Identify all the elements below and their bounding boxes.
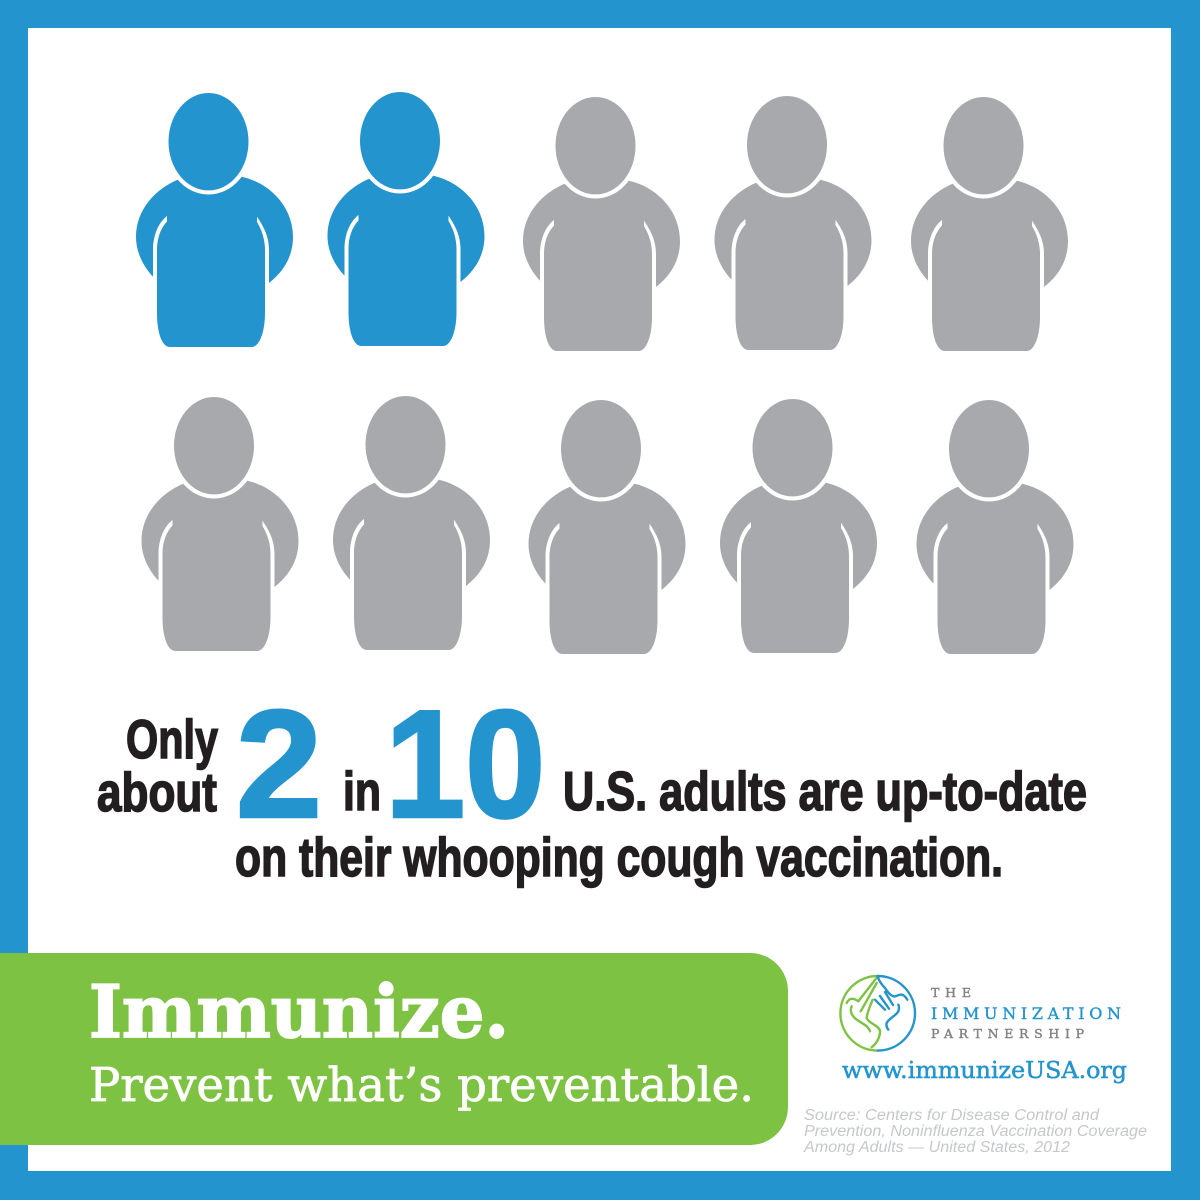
person 1 (blue, vaccinated) — [136, 89, 293, 347]
source citation — [803, 1107, 1147, 1156]
slogan heading: Immunize. — [89, 969, 509, 1054]
text: PARTNERSHIP: PARTNERSHIP — [931, 1026, 1084, 1041]
source line 1: Source: Centers for Disease Control and — [804, 1107, 1100, 1124]
text: on their whooping cough vaccination.: on their whooping cough vaccination. — [235, 826, 1003, 888]
text: Only: Only — [126, 708, 218, 770]
headline statistic — [97, 679, 1087, 888]
big number 2: 2 — [236, 679, 322, 850]
slogan subheading: Prevent what’s preventable. — [89, 1058, 754, 1113]
text: about: about — [97, 761, 217, 823]
person 5 (grey) — [911, 93, 1068, 351]
person 6 (grey) — [142, 393, 298, 651]
logo: hands in circle — [840, 976, 915, 1051]
text: IMMUNIZATION: IMMUNIZATION — [931, 1004, 1121, 1023]
person 4 (grey) — [714, 92, 872, 350]
person 7 (grey) — [333, 392, 490, 650]
source line 2: Prevention, Noninfluenza Vaccination Coverage — [804, 1123, 1147, 1140]
big number 10: 10 — [385, 679, 545, 850]
person 8 (grey) — [528, 396, 686, 654]
text: in: in — [343, 760, 381, 822]
source line 3: Among Adults — United States, 2012 — [803, 1139, 1070, 1156]
logo wordmark — [931, 985, 1121, 1041]
person 2 (blue, vaccinated) — [328, 88, 484, 346]
pictogram: ten adults, two highlighted — [136, 88, 1074, 654]
text: THE: THE — [931, 985, 971, 1000]
person 3 (grey) — [523, 93, 680, 351]
person 9 (grey) — [720, 395, 877, 653]
green slogan banner — [0, 953, 788, 1145]
website URL: www.immunizeUSA.org — [842, 1058, 1127, 1084]
person 10 (grey) — [916, 396, 1074, 654]
